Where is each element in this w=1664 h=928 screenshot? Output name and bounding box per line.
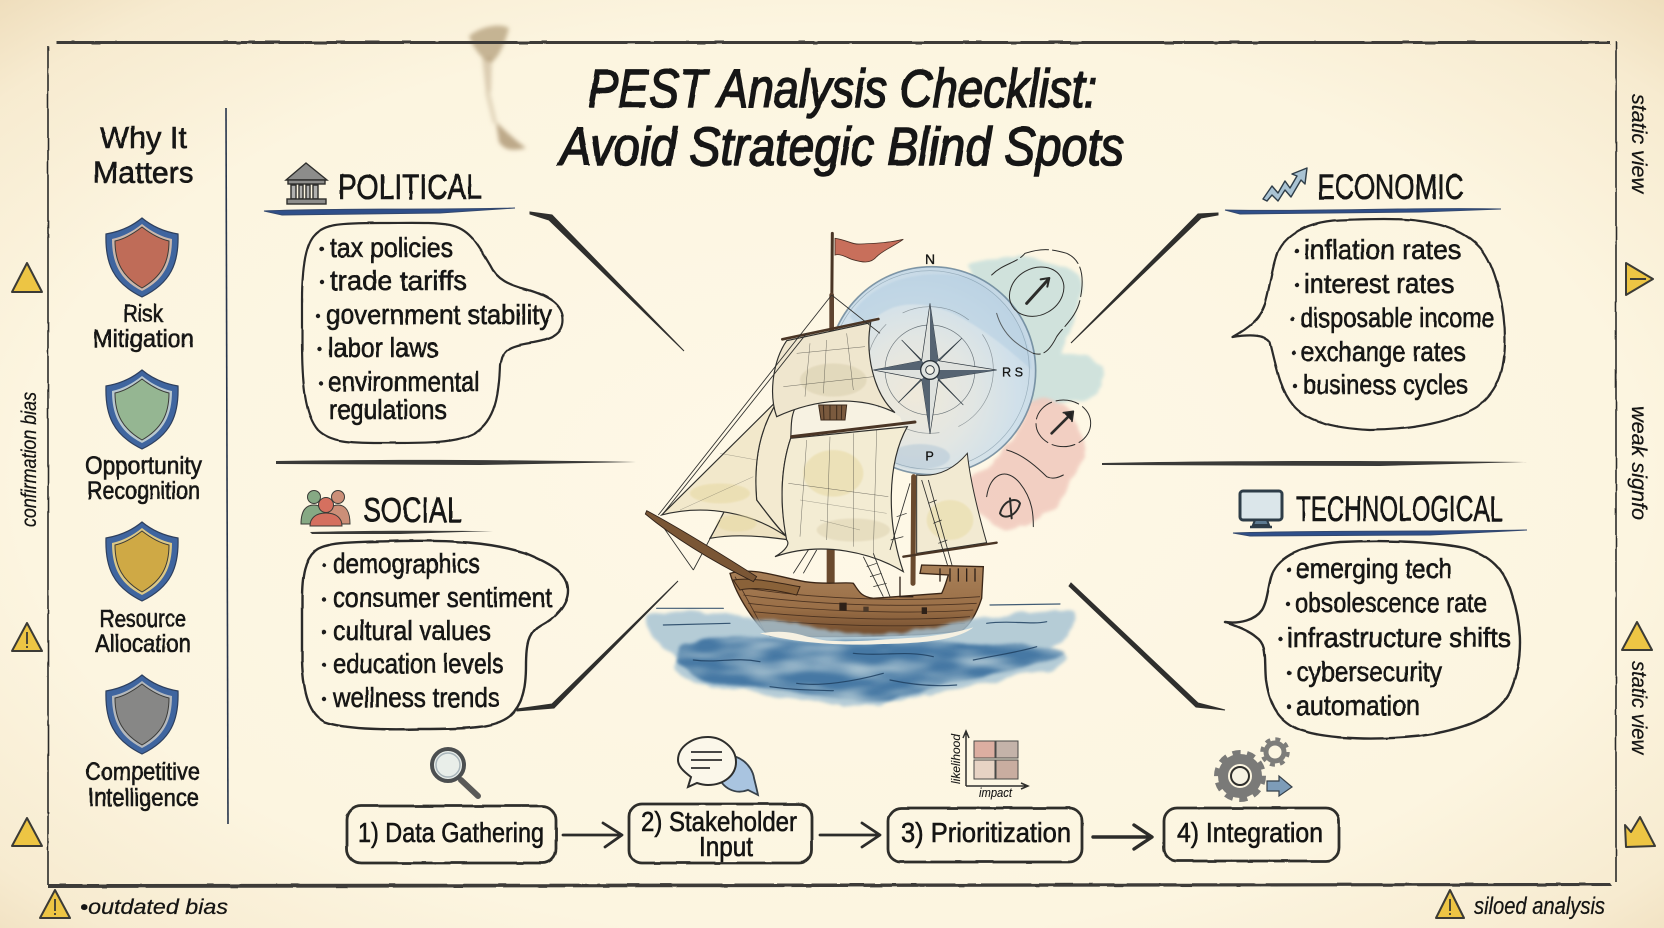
step 1 box: 1) Data Gathering xyxy=(358,817,544,848)
warning: bottom left xyxy=(40,890,70,918)
list: political factors: trade tariffs xyxy=(330,265,467,296)
side note: confirmation bias: confirmation bias xyxy=(18,392,41,527)
warning: right middle xyxy=(1622,622,1652,650)
warning: right top xyxy=(1626,263,1653,295)
icon: gears with arrow xyxy=(1217,739,1292,799)
bottom note: left: •outdated bias xyxy=(80,896,229,919)
title: PEST Analysis Checklist: xyxy=(588,59,1097,119)
heading underline xyxy=(310,531,493,534)
heading: economic: ECONOMIC xyxy=(1317,168,1464,207)
label: competitive intelligence: Intelligence xyxy=(88,784,199,812)
list: technological factors: obsolescence rate xyxy=(1295,587,1487,618)
list: technological factors: emerging tech xyxy=(1296,553,1452,584)
yards xyxy=(782,319,915,437)
list: political factors: government stability xyxy=(326,299,552,330)
step 2 box: Input xyxy=(699,831,753,862)
label: competitive intelligence xyxy=(85,758,200,812)
label: risk mitigation: Risk xyxy=(123,300,163,328)
heading: political: POLITICAL xyxy=(338,168,482,207)
list: technological factors: cybersecurity xyxy=(1296,656,1442,687)
icon: green shield xyxy=(106,370,178,449)
icon: yellow shield xyxy=(106,522,178,601)
icon: speech bubbles xyxy=(678,737,758,795)
bowsprit xyxy=(645,511,757,582)
rear sail xyxy=(917,453,987,553)
icon: group of people xyxy=(301,490,350,526)
list: social factors xyxy=(322,548,552,713)
title: Avoid Strategic Blind Spots xyxy=(557,117,1124,177)
compass: N xyxy=(925,251,935,267)
arrow: step 1 to 2 xyxy=(563,823,622,847)
speech bubble: technological xyxy=(1225,541,1520,738)
label: opportunity recognition xyxy=(85,452,202,505)
list: social factors: demographics xyxy=(333,548,480,579)
speech bubble: social xyxy=(302,541,568,729)
list: political factors: regulations xyxy=(329,394,447,425)
list: technological factors: automation xyxy=(1296,690,1420,721)
arrow: step 2 to 3 xyxy=(820,823,880,847)
connector: social to ship xyxy=(517,581,678,711)
side note: static view bottom: static view xyxy=(1627,661,1650,756)
list: political factors: tax policies xyxy=(330,232,453,263)
heading: why it matters: Matters xyxy=(93,155,194,190)
rear sail tint xyxy=(927,500,973,540)
list: social factors: wellness trends xyxy=(332,682,500,713)
heading: social: SOCIAL xyxy=(363,491,462,530)
label: opportunity recognition: Recognition xyxy=(87,477,200,505)
side note: static view top: static view xyxy=(1627,94,1650,195)
step 1 box xyxy=(347,806,556,863)
heading underline xyxy=(1233,530,1527,536)
upper sail xyxy=(773,323,895,417)
heading: technological: TECHNOLOGICAL xyxy=(1296,490,1503,529)
icon: magnifying glass xyxy=(432,749,478,796)
map sketches: arrows and islands xyxy=(987,250,1091,527)
icon: rising chart arrow xyxy=(1263,168,1307,201)
list: economic factors: business cycles xyxy=(1303,369,1468,400)
connector: technological to ship xyxy=(1069,583,1225,710)
list: social factors: consumer sentiment xyxy=(333,582,552,613)
rigging and sail seams xyxy=(658,295,953,597)
panel: social xyxy=(301,490,678,729)
label: competitive intelligence: Competitive xyxy=(85,758,200,786)
connector: economic to ship xyxy=(1071,213,1218,343)
speech bubble: economic xyxy=(1233,219,1505,430)
step 4 box: 4) Integration xyxy=(1177,817,1323,848)
label: risk mitigation: Mitigation xyxy=(93,325,194,353)
label: resource allocation: Allocation xyxy=(95,630,191,658)
connector: political to ship xyxy=(530,212,684,351)
warning: bottom right xyxy=(1436,890,1464,918)
icon: impact likelihood matrix: impact xyxy=(979,785,1013,800)
warning: left top xyxy=(12,263,42,292)
arrow: step 3 to 4 xyxy=(1093,825,1152,849)
title xyxy=(557,59,1124,177)
heading underline xyxy=(264,208,515,215)
label: resource allocation: Resource xyxy=(100,605,186,633)
sea xyxy=(646,604,1075,705)
label: opportunity recognition: Opportunity xyxy=(85,452,202,480)
icon: impact likelihood matrix: likelihood xyxy=(949,734,963,784)
divider: right middle xyxy=(1102,461,1527,466)
compass xyxy=(828,251,1036,475)
gap behind sails xyxy=(790,401,907,447)
label: risk mitigation xyxy=(93,300,194,353)
step 3 box: 3) Prioritization xyxy=(901,817,1071,848)
heading underline xyxy=(1225,209,1501,214)
step 2 box: 2) Stakeholder xyxy=(641,806,797,837)
label: resource allocation xyxy=(95,605,191,658)
lower sail xyxy=(775,427,907,572)
list: economic factors xyxy=(1290,234,1495,400)
list: economic factors: interest rates xyxy=(1304,268,1454,299)
jib sails xyxy=(662,398,797,540)
heading: why it matters xyxy=(93,120,194,190)
list: social factors: education levels xyxy=(333,648,504,679)
divider: left middle xyxy=(276,460,637,465)
step 3 box xyxy=(888,808,1082,862)
step 4 box xyxy=(1164,808,1339,861)
heading: why it matters: Why It xyxy=(100,120,187,155)
icon: impact likelihood matrix xyxy=(949,731,1028,800)
step 2 box xyxy=(629,804,812,863)
process flow xyxy=(347,731,1339,863)
side note: weak signals: weak signfo xyxy=(1627,406,1650,520)
warning: left bottom xyxy=(12,818,42,846)
illustration: ship and compass xyxy=(645,233,1102,705)
list: technological factors xyxy=(1278,553,1511,721)
warning: left middle xyxy=(12,623,42,651)
teal wash xyxy=(967,256,1102,407)
list: technological factors: infrastructure shifts xyxy=(1287,622,1511,653)
icon: grey shield xyxy=(106,675,178,754)
hull xyxy=(730,565,983,637)
list: political factors: environmental xyxy=(328,366,480,397)
list: economic factors: exchange rates xyxy=(1301,336,1466,367)
panel: political xyxy=(264,163,684,443)
warning: right bottom xyxy=(1625,817,1655,847)
icon: government building xyxy=(286,163,327,204)
compass: R S xyxy=(1002,366,1023,380)
panel: economic xyxy=(1071,168,1505,430)
sail tint xyxy=(690,363,890,542)
divider: sidebar xyxy=(226,108,228,824)
list: political factors xyxy=(316,232,552,425)
masts xyxy=(831,233,997,583)
bottom note: siloed analysis: siloed analysis xyxy=(1474,893,1605,920)
compass: P xyxy=(925,450,934,464)
icon: computer monitor xyxy=(1240,491,1282,527)
crow's nest xyxy=(819,405,847,420)
flag xyxy=(835,238,903,262)
pink wash xyxy=(953,401,1082,530)
speech bubble: political xyxy=(302,223,563,443)
icon: red shield xyxy=(106,218,178,297)
list: economic factors: inflation rates xyxy=(1304,234,1461,265)
panel: why it matters xyxy=(85,120,202,812)
coffee stain xyxy=(469,26,526,150)
list: political factors: labor laws xyxy=(328,332,439,363)
panel: technological xyxy=(1069,490,1527,738)
list: social factors: cultural values xyxy=(333,615,491,646)
list: economic factors: disposable income xyxy=(1300,302,1495,333)
